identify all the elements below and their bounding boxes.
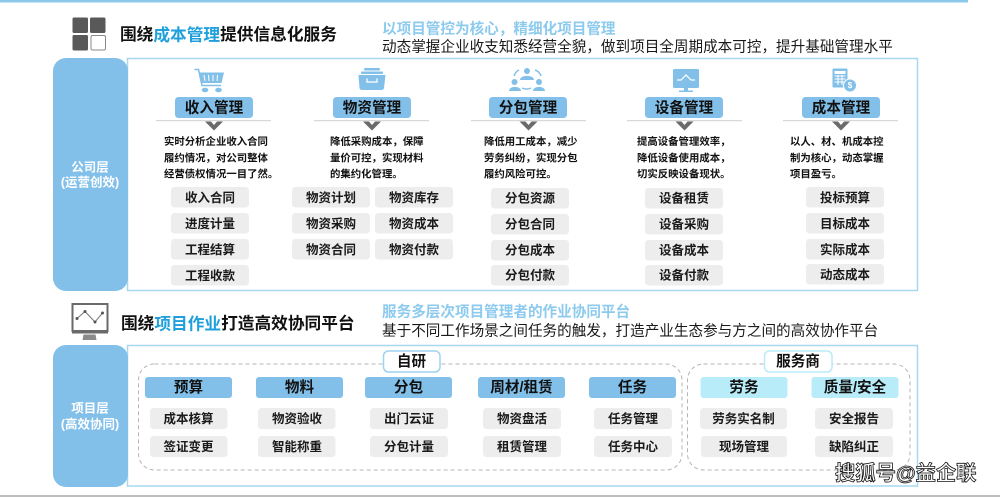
subheading: cost management: 动态掌握企业收支知悉经营全貌，做到项目全周期成本可控，提升基础管理水平 [382,38,893,56]
column: materials [256,377,343,457]
column: revenue management: 收入合同 [185,190,235,205]
column: subcontract [365,377,452,457]
column: materials and leasing: 物资盘活 [497,411,547,426]
heading: project operations: 围绕项目作业打造高效协同平台 [121,313,355,333]
column: equipment management: 提高设备管理效率， [637,135,731,148]
column: materials management: 物资采购 [306,216,356,231]
column: tasks: 任务管理 [608,411,658,426]
column: materials management: 物资成本 [389,216,439,231]
column: materials: 物资验收 [272,411,322,426]
column: subcontract: 分包计量 [384,439,434,454]
column: labor: 劳务 [729,378,759,396]
column: tasks [589,377,676,457]
column: revenue management: 收入管理 [185,98,244,116]
column: revenue management: 经营债权情况一目了然。 [164,168,278,180]
column: budget: 预算 [174,378,203,396]
column: subcontract management: 分包资源 [505,190,555,206]
tag: service providers [764,351,832,372]
column: revenue management: 工程收款 [185,268,235,283]
column: materials management: 量价可控，实现材料 [330,152,424,164]
column: subcontract management: 分包付款 [505,268,555,282]
column: subcontract management: 劳务纠纷，实现分包 [484,152,578,164]
company layer tab [53,58,128,291]
column: tasks: 任务中心 [608,439,658,454]
column: cost management: 成本管理 [812,98,871,116]
subheading: project operations [382,302,878,340]
icon: monitor with line chart [72,304,108,340]
heading: cost management: 围绕成本管理提供信息化服务 [120,24,337,44]
column: materials management: 的集约化管理。 [330,168,403,180]
column: materials and leasing: 租赁管理 [497,439,547,454]
column: quality and safety [812,377,898,457]
column: revenue management [156,70,278,286]
column: subcontract: 出门云证 [384,411,434,426]
group: service providers [688,351,910,470]
column: cost management: 项目盈亏。 [790,168,842,180]
column: budget: 成本核算 [163,411,214,426]
column: labor: 现场管理 [719,439,769,454]
group: in-house [138,351,682,470]
column: cost management: 实际成本 [820,242,870,257]
column: subcontract management: 分包成本 [505,242,555,258]
column: revenue management: 工程结算 [185,242,235,257]
column: quality and safety: 安全报告 [829,411,879,426]
column: labor [700,377,788,457]
column: materials: 智能称重 [272,439,322,454]
tag: service providers: 服务商 [776,352,820,370]
column: subcontract management: 降低用工成本，减少 [484,135,578,148]
subheading: cost management [382,20,893,56]
column: cost management: 制为核心，动态掌握 [790,152,884,164]
column: materials management [292,68,453,260]
column: materials and leasing [478,377,565,457]
column: subcontract management [471,68,586,286]
column: subcontract: 分包 [394,378,423,396]
panel: project layer [53,345,918,487]
column: equipment management: 降低设备使用成本， [637,152,731,164]
column: tasks: 任务 [618,378,647,396]
column: equipment management: 设备付款 [659,268,709,282]
company layer tab: (运营创效) [61,174,119,190]
project layer tab: (高效协同) [61,416,119,432]
icon: people cycle [509,68,545,91]
column: budget: 签证变更 [163,439,214,454]
column: cost management: 以人、材、机成本控 [790,135,884,148]
column: labor: 劳务实名制 [712,411,775,426]
column: materials and leasing: 周材/租赁 [490,379,553,396]
column: revenue management: 履约情况，对公司整体 [164,152,269,164]
column: materials management: 物资库存 [389,190,439,205]
subheading: project operations: 基于不同工作场景之间任务的触发，打造产业生态参与方之间的高效协作平台 [382,322,878,340]
column: materials management: 物资付款 [389,242,439,257]
column: revenue management: 实时分析企业收入合同 [164,135,268,148]
column: materials management: 物资合同 [306,242,356,257]
column: equipment management: 设备采购 [659,216,709,232]
column: equipment management: 设备成本 [659,242,709,258]
column: materials management: 物资管理 [343,98,402,116]
column: cost management: 投标预算 [820,190,870,205]
column: equipment management: 设备管理 [655,98,714,116]
column: materials: 物料 [285,378,314,396]
icon: materials box [358,68,386,90]
tag: in-house: 自研 [397,352,426,370]
column: equipment management [627,69,742,286]
icon: equipment monitor [673,69,699,92]
icon: shopping cart [194,70,224,92]
column: quality and safety: 质量/安全 [824,378,887,396]
project layer tab: 项目层 [71,402,109,416]
column: cost management: 目标成本 [820,216,870,231]
column: revenue management: 进度计量 [185,216,235,231]
tag: in-house [384,351,440,372]
icon: calculator with coin: $ [848,81,853,90]
icon: calculator with coin [832,68,856,92]
column: materials management: 物资计划 [306,190,356,205]
column: equipment management: 设备租赁 [659,190,709,206]
panel: company layer [53,58,918,291]
column: subcontract management: 分包管理 [499,98,558,116]
company layer tab: 公司层 [71,160,109,174]
subheading: cost management: 以项目管控为核心，精细化项目管理 [382,20,616,38]
column: materials management: 降低采购成本，保障 [330,135,424,148]
column: subcontract management: 履约风险可控。 [484,168,557,180]
column: quality and safety: 缺陷纠正 [829,439,879,454]
project layer tab [53,345,128,487]
column: budget [145,377,232,457]
column: equipment management: 切实反映设备现状。 [637,168,731,180]
column: cost management [783,68,898,284]
subheading: project operations: 服务多层次项目管理者的作业协同平台 [382,302,630,320]
icon: four squares [72,18,106,50]
column: subcontract management: 分包合同 [505,216,555,232]
watermark: 搜狐号@益企联 [835,461,976,485]
column: cost management: 动态成本 [820,267,870,282]
